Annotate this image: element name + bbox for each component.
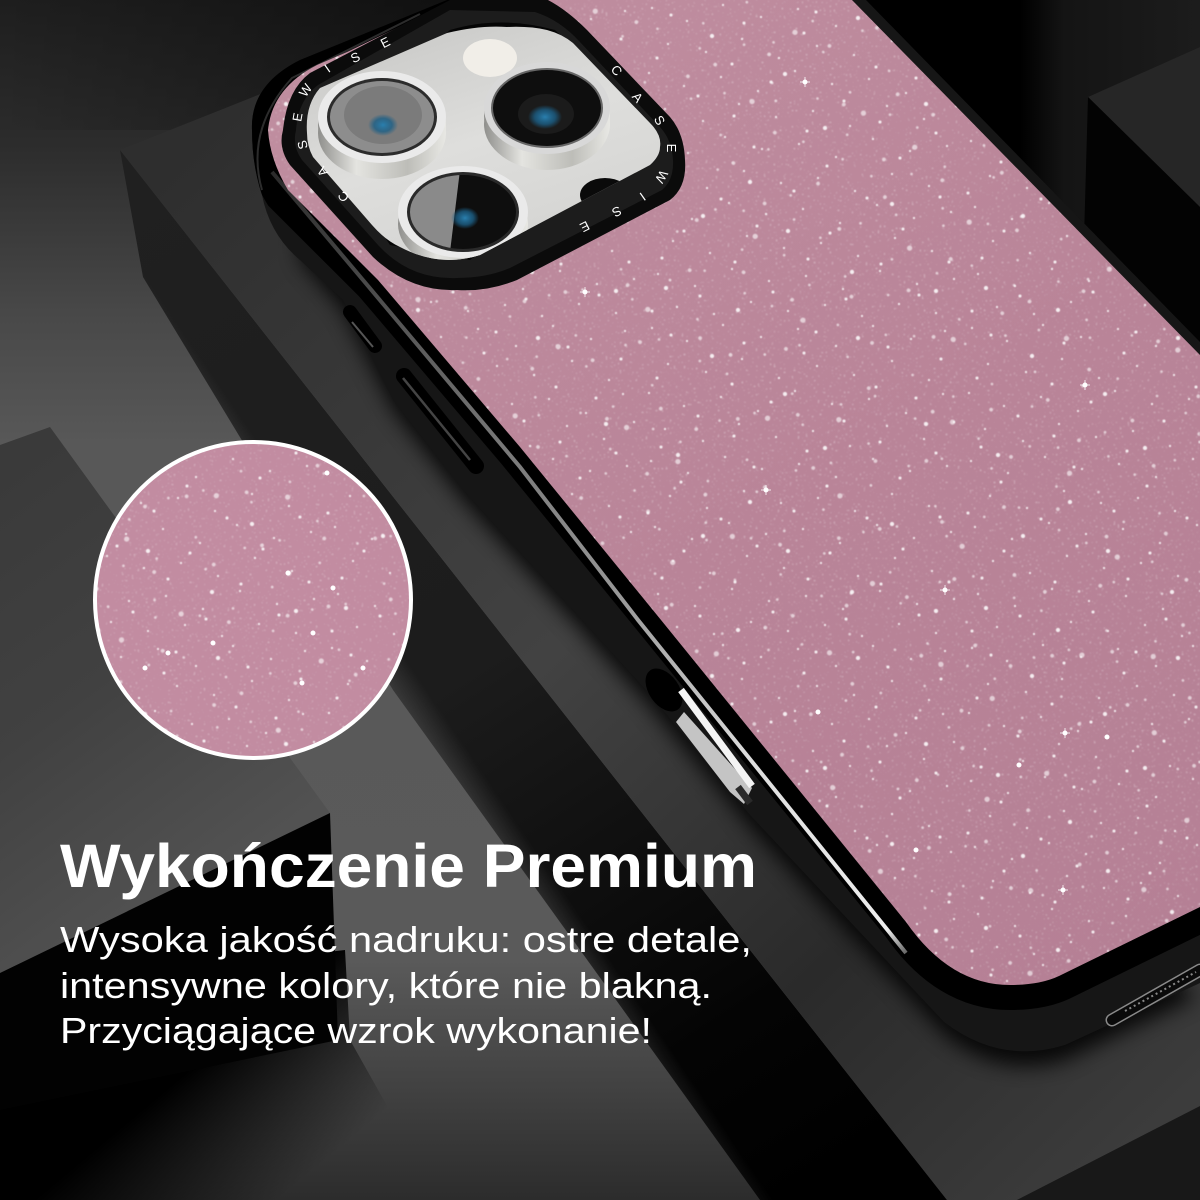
title: Wykończenie Premium	[60, 832, 757, 900]
CASEWISE lettering: C	[608, 62, 625, 79]
side buttons	[350, 312, 476, 466]
lens bottom	[398, 166, 528, 270]
flash	[463, 39, 517, 77]
CASEWISE lettering: S	[348, 49, 363, 66]
lens top right	[484, 62, 610, 170]
CASEWISE lettering: I	[322, 61, 333, 76]
speaker slot	[1112, 970, 1200, 1020]
CASEWISE lettering: A	[314, 164, 331, 180]
description text	[60, 919, 752, 1051]
glass window	[307, 27, 660, 260]
description text: Przyciągające wzrok wykonanie!	[60, 1010, 652, 1051]
CASEWISE lettering: W	[652, 168, 671, 186]
silver side button	[638, 662, 752, 804]
CASEWISE lettering: W	[296, 80, 315, 100]
CASEWISE lettering: C	[335, 188, 352, 205]
CASEWISE lettering: S	[294, 138, 311, 151]
CASEWISE lettering: E	[577, 218, 592, 235]
side highlight stripe	[272, 172, 906, 953]
microphone hole	[580, 178, 620, 201]
description text: intensywne kolory, które nie blakną.	[60, 965, 712, 1006]
CASEWISE lettering: E	[378, 34, 393, 51]
phone case body	[252, 0, 1200, 1066]
top-right black block	[800, 0, 1200, 380]
CASEWISE lettering: E	[289, 111, 306, 123]
CASEWISE lettering: S	[609, 203, 624, 220]
CASEWISE lettering	[289, 34, 679, 235]
camera bump	[282, 0, 685, 290]
CASEWISE lettering: S	[651, 113, 668, 128]
CASEWISE lettering: E	[664, 144, 679, 153]
description text: Wysoka jakość nadruku: ostre detale,	[60, 919, 752, 960]
pink glitter back plate	[250, 0, 1200, 1000]
circular glitter close-up	[93, 440, 413, 760]
lens top left	[318, 71, 446, 179]
CASEWISE lettering: I	[637, 189, 648, 204]
glitter stars	[580, 77, 1090, 895]
camera ring with lettering	[282, 0, 685, 290]
CASEWISE lettering: A	[629, 89, 646, 106]
small block in the foreground left	[0, 427, 440, 1200]
